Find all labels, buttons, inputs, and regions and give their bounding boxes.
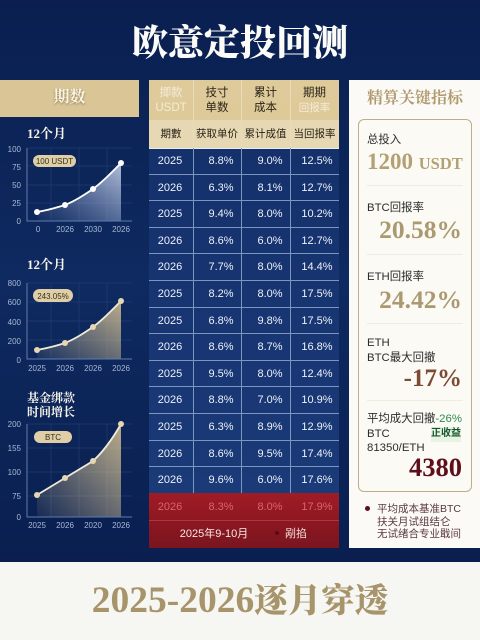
line chart 1: 100 (8, 145, 22, 154)
metric: BTC return: 20.58% (379, 215, 462, 244)
red dot note: 剐掐 (285, 528, 307, 540)
table rows: 2026 (158, 235, 182, 247)
line chart 2: 800 (8, 279, 22, 288)
pill label: 243.05% (37, 292, 69, 301)
table rows: 8.6% (208, 235, 234, 247)
line chart 3: 2026 (112, 521, 130, 530)
line chart 3: 0 (17, 513, 22, 522)
footnote (365, 503, 461, 540)
header col 2: 单数 (206, 102, 228, 114)
metric: BTC return: BTC回报率 (367, 202, 424, 214)
table rows: 2025 (158, 421, 182, 433)
header col 3 (254, 86, 277, 114)
line chart 2 (8, 279, 132, 373)
table rows: 8.0% (257, 208, 283, 220)
header col 4 (299, 86, 330, 114)
table rows: 8.6% (208, 341, 234, 353)
metric: average cost: 81350/ETH (367, 442, 425, 454)
footer band (0, 562, 480, 640)
metric: max drawdown: ETH (367, 337, 390, 349)
line chart 1: 50 (12, 181, 22, 190)
header col 3: 成本 (254, 102, 277, 114)
header col 2 (206, 86, 228, 114)
line chart 2: 2025 (28, 364, 46, 373)
chart heading 3: 基金绑款 (27, 391, 75, 405)
line chart 3: 2026 (56, 521, 74, 530)
metric: average cost: 平均成大回撤-26% (367, 413, 462, 425)
table rows: 9.6% (208, 474, 234, 486)
header col 3: 累计 (254, 87, 277, 99)
bullet (365, 506, 370, 511)
table rows: 9.5% (208, 368, 234, 380)
red row values: 8.3% (208, 501, 234, 513)
metric: average cost: 4380 (409, 452, 462, 482)
metric: average cost: 正收益 (431, 428, 461, 439)
table rows: 7.0% (257, 394, 283, 406)
table rows: 8.2% (208, 288, 234, 300)
divider (367, 254, 463, 255)
table header (149, 80, 339, 148)
heading: periods (0, 80, 139, 117)
red row values (149, 493, 339, 521)
line chart 3: 200 (8, 420, 22, 429)
table rows: 8.8% (208, 155, 234, 167)
line chart 3: 2020 (84, 521, 102, 530)
line chart 1 (8, 145, 132, 234)
heading: key metrics: 精算关键指标 (367, 90, 463, 107)
table rows: 17.5% (301, 315, 333, 327)
table rows: 2026 (158, 182, 182, 194)
footnote text: 无试绪合专业戢间 (377, 528, 461, 540)
line chart 1: 75 (12, 163, 22, 172)
line chart 1: 2030 (84, 225, 102, 234)
table rows: 6.8% (208, 315, 234, 327)
header col 1 (155, 86, 187, 114)
metric: max drawdown: BTC最大回撤 (367, 352, 435, 364)
red row values: 17.9% (301, 501, 333, 513)
table rows: 9.0% (257, 155, 283, 167)
footnote text: 平均成本基准BTC (377, 503, 461, 515)
footnote text (377, 503, 461, 540)
table rows: 2025 (158, 288, 182, 300)
chart heading 3: 时间增长 (27, 405, 75, 419)
table rows: 12.7% (301, 182, 333, 194)
chart heading 1: 12个月 (27, 126, 66, 141)
heading: periods: 期数 (53, 89, 86, 106)
metric: total invest: 总投入 (367, 134, 401, 146)
metric: BTC return (367, 201, 462, 244)
line chart 3 (8, 420, 132, 530)
table rows: 7.7% (208, 261, 234, 273)
line chart 2: 200 (8, 337, 22, 346)
table rows: 8.1% (257, 182, 283, 194)
table rows: 8.0% (257, 261, 283, 273)
table rows: 8.0% (257, 368, 283, 380)
line chart 1: 2026 (112, 225, 130, 234)
metric: total invest (367, 133, 463, 174)
divider (367, 323, 463, 324)
header col 4: 期期 (303, 87, 326, 99)
table rows: 10.9% (301, 394, 333, 406)
table rows: 9.5% (257, 448, 283, 460)
highlighted red row (149, 493, 339, 548)
table rows: 8.0% (257, 288, 283, 300)
line chart 3: 100 (8, 468, 22, 477)
line chart 1: 25 (12, 199, 22, 208)
line chart 3: 2025 (28, 521, 46, 530)
subheader row: 期數 (160, 128, 182, 140)
table rows: 2025 (158, 155, 182, 167)
line chart 3: 75 (12, 492, 22, 501)
table rows: 6.3% (208, 421, 234, 433)
panel: key metrics (349, 80, 480, 548)
table rows: 16.8% (301, 341, 333, 353)
header col 4: 回报率 (299, 102, 330, 114)
table rows: 2025 (158, 315, 182, 327)
table rows: 8.6% (208, 448, 234, 460)
metric: average cost (367, 412, 462, 482)
pill label: 100 USDT (36, 157, 73, 166)
footer title: 2025-2026逐月穿透 (92, 580, 388, 621)
table rows: 8.9% (257, 421, 283, 433)
pill label: BTC (45, 433, 61, 442)
table rows: 9.8% (257, 315, 283, 327)
subheader row: 累计成值 (244, 128, 286, 140)
metric: max drawdown (367, 337, 462, 392)
metric: total invest: 1200 USDT (367, 149, 463, 174)
table rows: 6.0% (257, 235, 283, 247)
red row values: 2026 (158, 501, 182, 513)
table rows: 9.4% (208, 208, 234, 220)
red row values: 8.0% (257, 501, 283, 513)
line chart 1: 0 (36, 225, 41, 234)
subheader row (149, 120, 339, 148)
table rows: 2026 (158, 341, 182, 353)
footnote text: 扶关月试组结仑 (377, 516, 450, 528)
metrics card (358, 119, 472, 492)
table rows: 8.8% (208, 394, 234, 406)
table rows: 2026 (158, 394, 182, 406)
header col 2: 技寸 (206, 87, 228, 99)
table rows: 2025 (158, 368, 182, 380)
table rows: 12.7% (301, 235, 333, 247)
divider (367, 185, 463, 186)
table rows: 12.5% (301, 155, 333, 167)
table rows: 17.5% (301, 288, 333, 300)
line chart 1: 0 (17, 217, 22, 226)
divider (367, 400, 463, 401)
table rows: 14.4% (301, 261, 333, 273)
header col 1: USDT (155, 102, 187, 114)
line chart 2: 400 (8, 318, 22, 327)
table rows: 12.9% (301, 421, 333, 433)
line chart 1: 2026 (56, 225, 74, 234)
metric: ETH return: 24.42% (379, 285, 462, 314)
metric: ETH return: ETH回报率 (367, 271, 424, 283)
metric: max drawdown: -17% (404, 365, 462, 392)
table rows: 8.7% (257, 341, 283, 353)
panel: left charts (0, 80, 139, 419)
line chart 2: 0 (17, 356, 22, 365)
table rows: 6.3% (208, 182, 234, 194)
line chart 3: 155 (8, 444, 22, 453)
table rows: 2025 (158, 208, 182, 220)
table rows: 10.2% (301, 208, 333, 220)
chart heading 3 (27, 391, 75, 419)
chart heading 2: 12个月 (27, 257, 66, 272)
line chart 2: 2026 (112, 364, 130, 373)
line chart 2: 600 (8, 298, 22, 307)
table rows: 2026 (158, 474, 182, 486)
header col 1: 揤款 (160, 87, 182, 99)
title: 欧意定投回测 (132, 23, 348, 63)
date range: 2025年9-10月 (180, 528, 248, 540)
table rows: 2026 (158, 261, 182, 273)
subheader row: 当回报率 (294, 128, 336, 140)
table rows: 12.4% (301, 368, 333, 380)
metric: average cost: BTC (367, 428, 390, 440)
line chart 2: 2026 (56, 364, 74, 373)
table rows: 6.0% (257, 474, 283, 486)
subheader row: 获取单价 (196, 128, 238, 140)
table rows: 2026 (158, 448, 182, 460)
line chart 2: 2026 (84, 364, 102, 373)
table rows: 17.6% (301, 474, 333, 486)
table rows: 17.4% (301, 448, 333, 460)
metric: ETH return (367, 270, 462, 314)
